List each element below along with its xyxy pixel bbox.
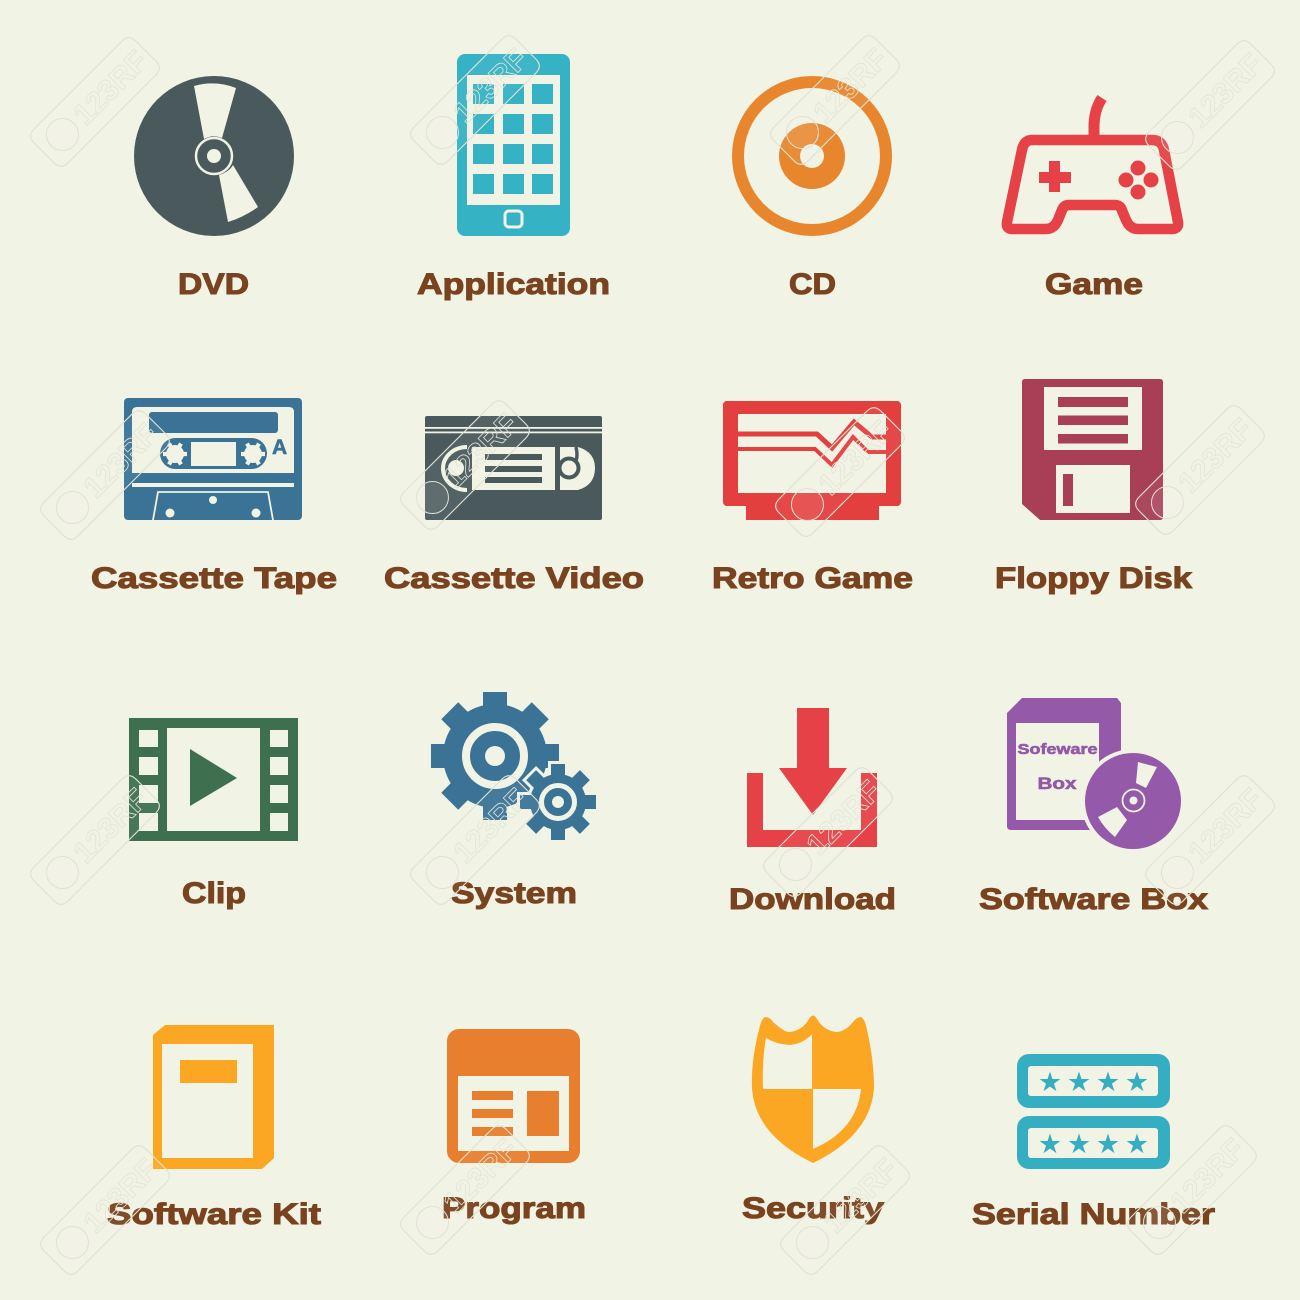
watermarks: 123RF: [77, 1153, 164, 1240]
icon: software box: [1007, 698, 1185, 853]
watermarks: 123RF: [1182, 48, 1269, 135]
icon: CD: [738, 82, 886, 230]
label: Program: Program: [442, 1192, 586, 1225]
icon: software box: Sofeware: [1018, 742, 1098, 758]
watermarks: 123RF: [447, 783, 534, 870]
watermarks: 123RF: [1182, 783, 1269, 870]
watermarks: 123RF: [67, 783, 154, 870]
icon: serial number: ★: [1125, 1129, 1149, 1160]
watermarks: 123RF: [77, 418, 164, 505]
label: Download: Download: [729, 883, 896, 916]
label: System: System: [451, 877, 577, 910]
icon: security shield: [752, 1016, 874, 1163]
label: Cassette Video: Cassette Video: [384, 562, 644, 595]
label: Software Kit: Software Kit: [107, 1198, 321, 1231]
icon: serial number: ★: [1096, 1129, 1120, 1160]
icon: serial number: ★: [1125, 1067, 1149, 1098]
label: Security: Security: [742, 1192, 884, 1225]
label: Clip: Clip: [182, 877, 246, 910]
label: Software Box: Software Box: [979, 883, 1208, 916]
watermarks: 123RF: [812, 415, 899, 502]
watermarks: 123RF: [437, 1133, 524, 1220]
icon: serial number: ★: [1067, 1129, 1091, 1160]
watermarks: 123RF: [447, 43, 534, 130]
icon: video cassette: [425, 416, 602, 520]
icon: serial number: ★: [1096, 1067, 1120, 1098]
icon: serial number: ★: [1067, 1067, 1091, 1098]
watermarks: 123RF: [437, 408, 524, 495]
icon: software kit: [153, 1025, 274, 1169]
icon: game controller: [1007, 98, 1178, 229]
icon: serial number: ★: [1038, 1129, 1062, 1160]
icon: serial number: ★: [1038, 1067, 1062, 1098]
label: CD: CD: [789, 268, 836, 301]
icon: application phone: [457, 54, 570, 236]
label: Retro Game: Retro Game: [712, 562, 913, 595]
label: Application: Application: [417, 268, 610, 301]
watermarks: 123RF: [807, 43, 894, 130]
icon: program window: [447, 1029, 580, 1163]
watermarks: 123RF: [67, 45, 154, 132]
icon: DVD: [134, 76, 294, 236]
icon: cassette tape: [124, 398, 302, 520]
icon: download: [747, 708, 877, 847]
icon: floppy disk: [1022, 379, 1163, 520]
watermarks: 123RF: [817, 1153, 904, 1240]
icon: cassette tape: A: [272, 436, 287, 459]
icon: film clip: [129, 718, 298, 841]
watermarks: 123RF: [800, 775, 887, 862]
watermarks: 123RF: [1172, 413, 1259, 500]
label: Cassette Tape: Cassette Tape: [91, 562, 337, 595]
icon: retro game cartridge: [723, 401, 901, 520]
label: DVD: DVD: [178, 268, 249, 301]
label: Game: Game: [1045, 268, 1143, 301]
icon: software box: Box: [1038, 774, 1077, 793]
label: Floppy Disk: Floppy Disk: [995, 562, 1192, 595]
watermarks: 123RF: [1164, 1133, 1251, 1220]
icon: gears: [431, 692, 596, 840]
icon: serial number: [1017, 1054, 1170, 1169]
label: Serial Number: Serial Number: [972, 1198, 1215, 1231]
